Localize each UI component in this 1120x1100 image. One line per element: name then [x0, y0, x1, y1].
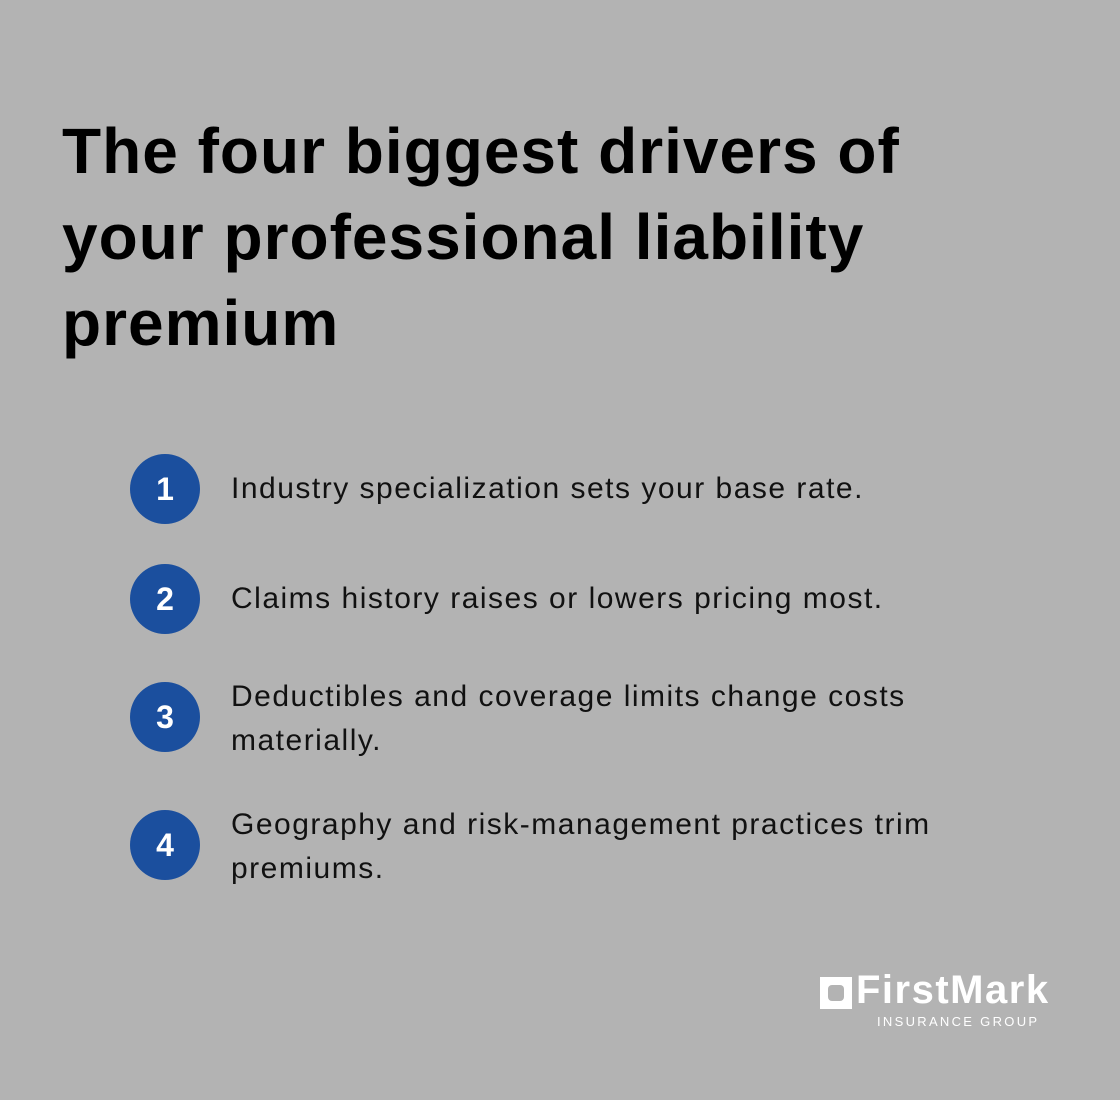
item 4: 4	[156, 827, 174, 863]
item 3: 3	[156, 699, 174, 735]
logo: FirstMark	[856, 968, 1050, 1012]
item 4: Geography and risk-management practices trim	[231, 808, 931, 841]
logo	[820, 968, 1050, 1029]
item 2: 2	[156, 581, 174, 617]
item 3: materially.	[231, 724, 382, 757]
item 4	[130, 808, 931, 885]
item 2	[130, 564, 884, 634]
title: premium	[62, 287, 339, 359]
item 1: Industry specialization sets your base rate.	[231, 472, 864, 505]
logo: INSURANCE GROUP	[877, 1014, 1039, 1029]
item 1: 1	[156, 471, 174, 507]
item 2: Claims history raises or lowers pricing most.	[231, 582, 884, 615]
title: your professional liability	[62, 201, 864, 273]
item 3	[130, 680, 906, 757]
item 3: Deductibles and coverage limits change costs	[231, 680, 906, 713]
item 1	[130, 454, 864, 524]
title	[62, 115, 900, 359]
item 4: premiums.	[231, 852, 385, 885]
title: The four biggest drivers of	[62, 115, 900, 187]
